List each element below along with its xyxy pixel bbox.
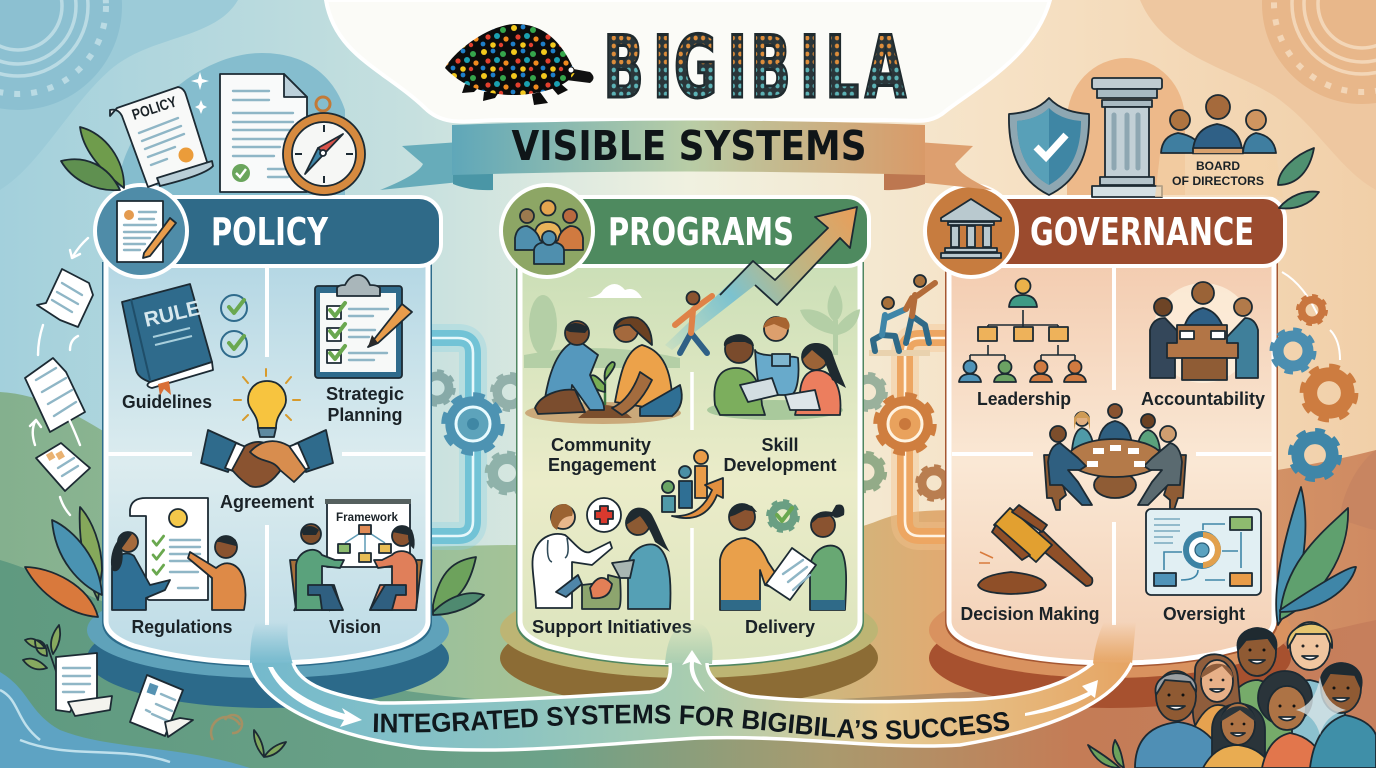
flow arrows: [30, 238, 88, 515]
icon: rule book with checks: RULE: [142, 297, 203, 332]
dividers: [107, 266, 428, 625]
icon: policy scroll: [110, 87, 213, 187]
person: blond man: [1282, 622, 1345, 768]
ribbon heading: VISIBLE SYSTEMS: [512, 122, 866, 170]
icon: clipboard with pencil: [315, 275, 412, 378]
label: Decision Making: [960, 603, 1100, 624]
panel: programs: [516, 262, 864, 667]
concentric rings top right: [1274, 0, 1376, 92]
person: woman in orange: [1258, 671, 1326, 768]
foliage and papers bottom left: [23, 507, 484, 757]
paper icon: [36, 443, 90, 491]
water: [0, 672, 250, 768]
label: Planning: [328, 404, 402, 425]
banner text: INTEGRATED SYSTEMS FOR BIGIBILA’S SUCCESS: [374, 704, 1010, 740]
illustration: org chart: [959, 278, 1086, 382]
leaves: [80, 507, 102, 600]
integrated systems banner: [248, 624, 1136, 752]
sparkle: [1296, 677, 1346, 735]
illustration: growth arrow: [665, 207, 857, 353]
label: Accountability: [1141, 388, 1266, 409]
label: Oversight: [1163, 603, 1245, 624]
lower ground: [0, 560, 1376, 768]
illustration: accountability meeting: [1150, 282, 1258, 383]
icon: column: [1092, 78, 1162, 197]
person: man on right: [1310, 663, 1376, 768]
arrow: right flow: [1025, 680, 1098, 716]
illustration: board room table: [1044, 404, 1186, 510]
illustration: community planting: [525, 317, 682, 424]
illustration: delivery: [720, 502, 846, 610]
ribbon tail: left: [380, 142, 460, 190]
icon: policy scroll: POLICY: [130, 93, 179, 124]
background blob: top left: [0, 0, 238, 190]
person: dark haired man: [1222, 628, 1292, 768]
arrow: center up: [682, 650, 705, 692]
paper icon: [25, 358, 85, 432]
paper icon: [37, 269, 93, 327]
illustration: oversight diagram: [1146, 509, 1261, 595]
icon: community people: [501, 185, 593, 277]
sparkles: [191, 72, 209, 114]
label: Guidelines: [122, 391, 212, 412]
heading: PROGRAMS: [608, 210, 794, 254]
board label: BOARD: [1196, 159, 1240, 173]
title: turtle logo: [445, 24, 594, 105]
illustration: regulations: [111, 498, 246, 610]
label: Engagement: [548, 454, 656, 475]
band fade: policy: [250, 622, 293, 664]
icon: compass: [283, 97, 365, 195]
dividers: [952, 267, 1272, 625]
side gears right: [1273, 272, 1354, 478]
label: Strategic: [326, 383, 404, 404]
band fade: governance: [1093, 622, 1136, 664]
connector: policy to programs: [421, 338, 527, 536]
leaves right of policy: [433, 557, 476, 612]
sprouts: [23, 625, 60, 680]
band fill: [250, 663, 1132, 750]
label: Regulations: [132, 616, 232, 637]
gear: main: [878, 397, 932, 451]
connector: programs to governance: [848, 338, 950, 536]
icons: governance top group: [1009, 78, 1319, 208]
group of community people: [1135, 622, 1376, 768]
ribbon body: [452, 120, 925, 175]
domes behind top icons: [117, 53, 1185, 197]
sprout: [254, 730, 286, 757]
person: elder man: [1135, 671, 1225, 768]
concentric rings top left: [0, 0, 106, 94]
illustration: support initiatives: [532, 498, 670, 609]
icon: gavel: [978, 505, 1092, 594]
figure: reaching person: [675, 292, 712, 353]
icon: shield: [1009, 98, 1089, 195]
icon: light bulb: [234, 369, 300, 437]
board label: OF DIRECTORS: [1172, 174, 1264, 188]
icon: document and pencil: [95, 185, 187, 277]
icon: growth people: [662, 450, 723, 518]
icon: leaves: [61, 127, 124, 190]
icon: institution building: [925, 185, 1017, 277]
background blob: top right: [1140, 0, 1376, 190]
illustration: vision: Framework: [336, 512, 399, 524]
icons: policy top group: [61, 72, 365, 195]
illustration: skill development: [707, 317, 846, 420]
ribbon folds: [453, 165, 493, 190]
icon: board of directors: [1155, 95, 1283, 197]
label: Development: [724, 454, 836, 475]
ribbon: visible systems: [380, 120, 992, 190]
icon: handshake: [201, 430, 333, 487]
gear: main: [446, 397, 500, 451]
icon: rule book with checks: [122, 284, 247, 396]
label: Community: [551, 434, 652, 455]
label: Vision: [329, 616, 381, 637]
document: form: [130, 675, 183, 736]
background blob: top center: [326, 0, 1050, 122]
header: governance: [925, 185, 1285, 277]
panel: policy: [102, 262, 432, 667]
foliage right: [1088, 450, 1376, 768]
pedestal: programs: [500, 582, 878, 708]
person: young woman: [1203, 703, 1272, 768]
small gears: [421, 372, 453, 404]
label: Leadership: [977, 388, 1071, 409]
arrow: left flow: [268, 667, 362, 727]
band fade: programs: [665, 622, 713, 664]
icon: document: [220, 74, 307, 192]
band outlines: [250, 663, 1132, 750]
flow arcs: [1282, 272, 1340, 360]
header: programs: [501, 185, 869, 277]
side flow: papers left: [25, 238, 93, 515]
person: long haired woman: [1190, 654, 1245, 768]
title: brand name: BIGIBILA: [603, 18, 907, 117]
sprout bottom: [1088, 740, 1124, 768]
figures: climbing people: [869, 275, 935, 356]
heading: POLICY: [211, 210, 329, 254]
background trees: [524, 285, 860, 368]
swirl marks: [211, 715, 242, 740]
pedestal: policy: [87, 582, 449, 708]
ground hills: [0, 392, 1376, 768]
pedestal: governance: [929, 582, 1291, 708]
heading: GOVERNANCE: [1030, 210, 1254, 254]
label: Delivery: [745, 616, 816, 637]
document: paper: [56, 653, 97, 712]
label: Agreement: [220, 491, 314, 512]
icon: leaves: [1278, 148, 1319, 208]
ribbon tail: right: [917, 142, 992, 190]
illustration: vision: [290, 499, 422, 611]
dividers: [690, 372, 694, 620]
label: Support Initiatives: [532, 616, 692, 637]
header: policy: [95, 185, 441, 277]
label: Skill: [762, 434, 798, 455]
distant hill: [1340, 450, 1376, 530]
panel: governance: [945, 262, 1278, 667]
icon: cloud: [587, 284, 642, 298]
